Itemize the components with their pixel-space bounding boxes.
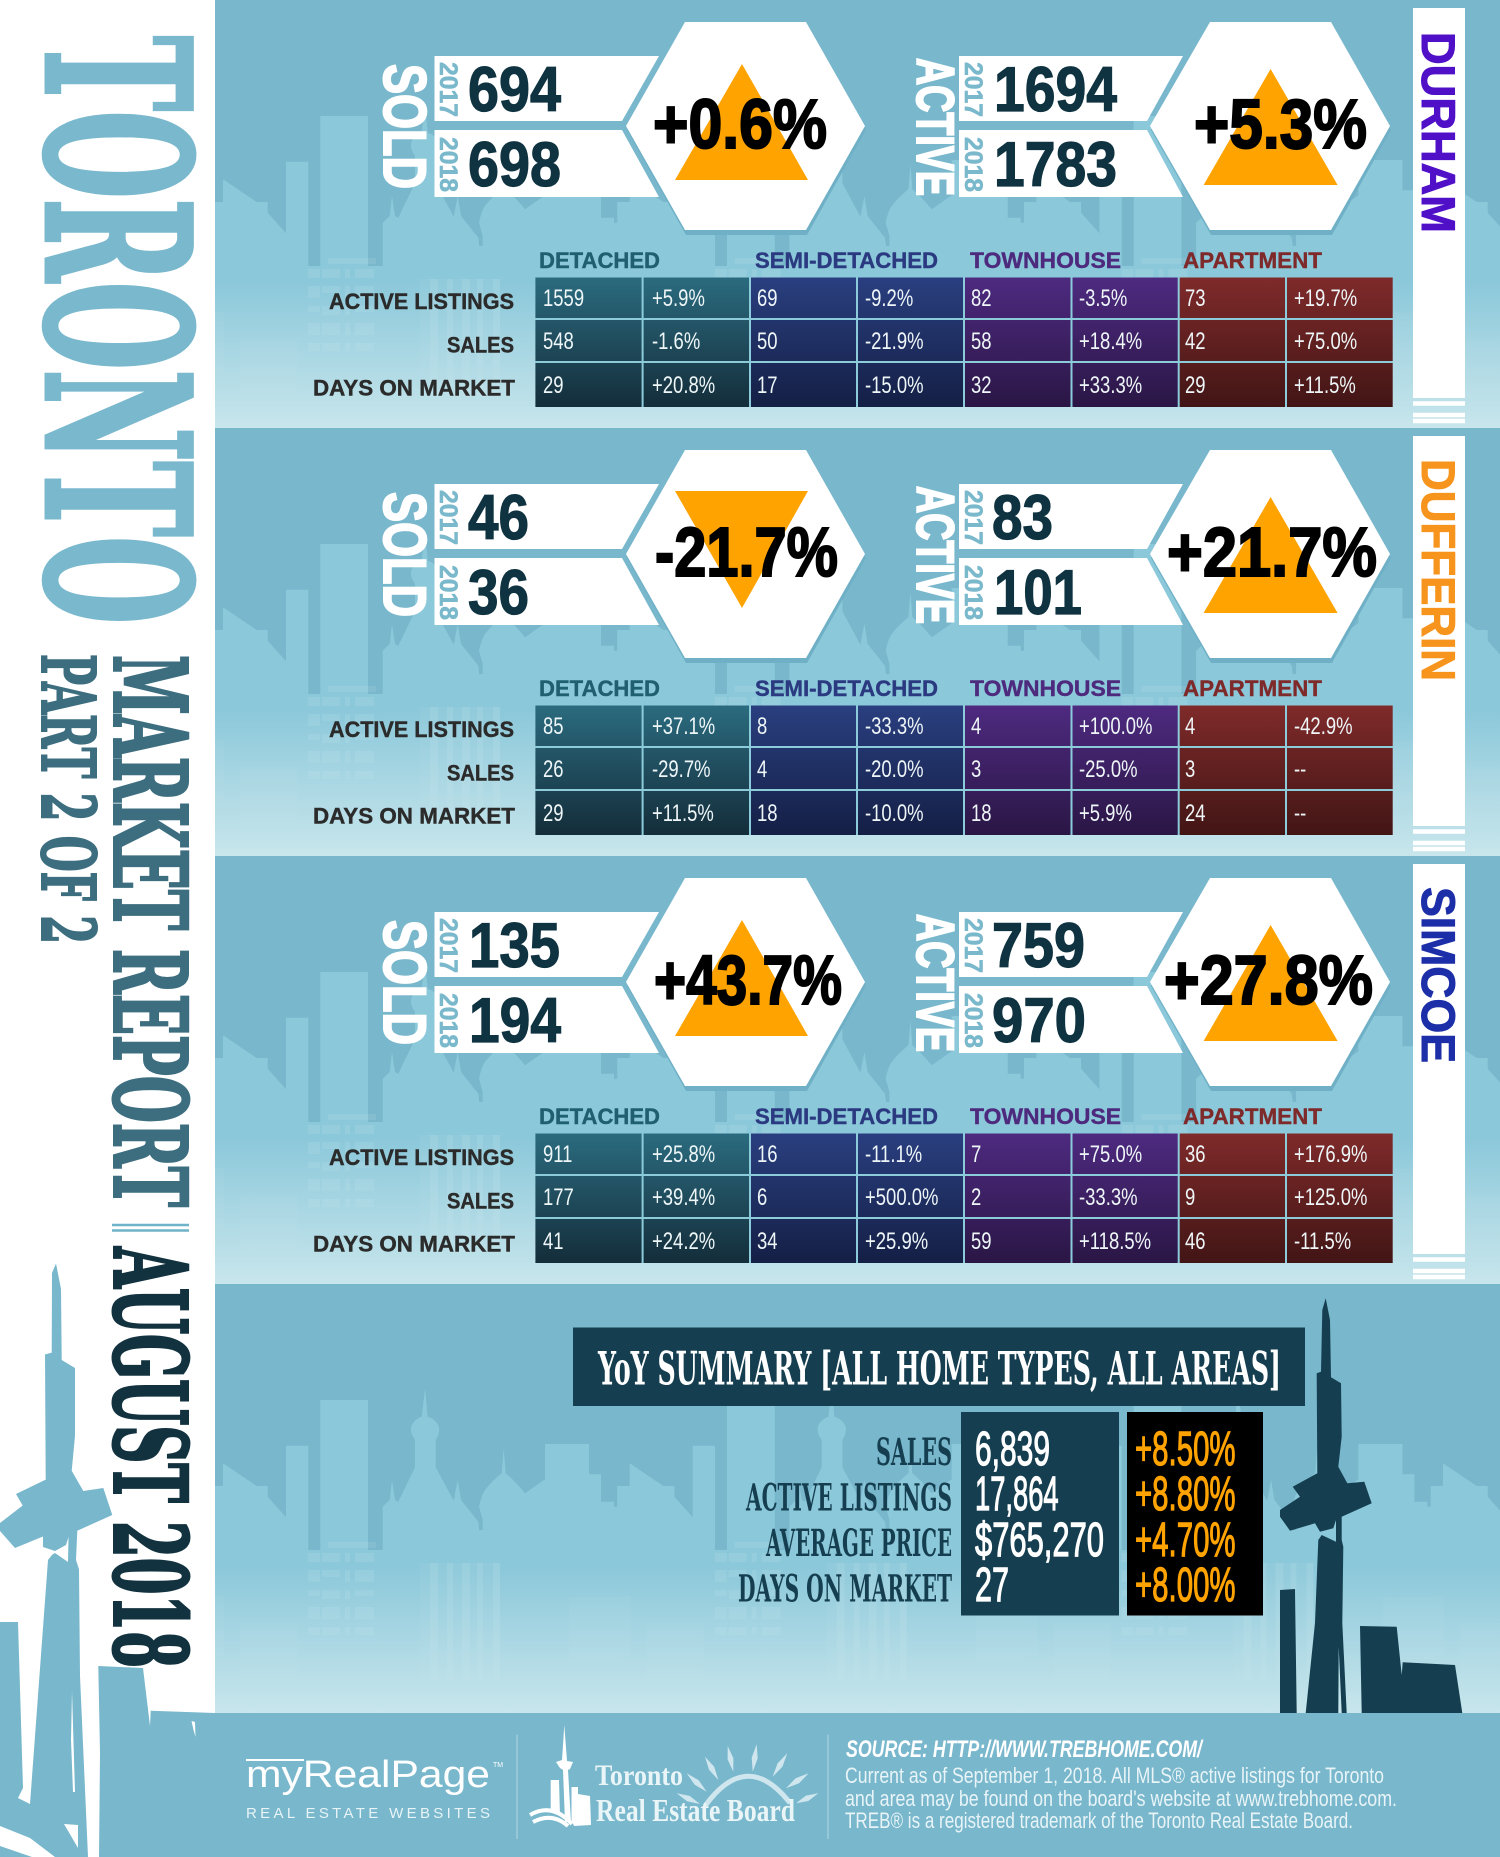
summary percentages: +8.00% [1135,1559,1236,1612]
region tab: Dufferin [1412,436,1465,849]
data table: +75.0% [1079,1141,1142,1168]
data table: 41 [543,1228,564,1255]
data table: 911 [543,1141,572,1168]
active banners [905,55,1183,200]
panel: Durham [215,0,1500,429]
data table: +39.4% [652,1184,715,1211]
title: Toronto: TORONTO [0,36,233,624]
table headers: DETACHED [539,676,660,701]
data table: -33.3% [865,713,924,740]
summary values: 6,839 [975,1423,1050,1476]
sold banners: 2018 [434,137,462,192]
data table: +19.7% [1294,285,1357,312]
active banners: 1783 [994,130,1117,200]
data table: +33.3% [1079,372,1142,399]
footer [98,1666,1500,1857]
data table: +20.8% [652,372,715,399]
data table: -25.0% [1079,756,1138,783]
data table: 18 [757,800,778,827]
table headers: SEMI-DETACHED [755,248,938,273]
data table: +11.5% [1294,372,1356,399]
summary labels: SALES [876,1430,952,1474]
sold banners: 698 [468,130,561,200]
sold banners [371,483,659,628]
icon: CN tower and buildings dark [1280,1298,1462,1713]
logo: myRealPage: REAL ESTATE WEBSITES [246,1805,490,1822]
data table: 17 [757,372,778,399]
summary labels [738,1430,952,1610]
data table: +75.0% [1294,328,1357,355]
data table: 85 [543,713,564,740]
data table: -21.9% [865,328,924,355]
active banners: 2017 [959,62,987,117]
logo: myRealPage: TM [493,1762,503,1769]
active banners: ACTIVE [905,914,964,1052]
data table: 7 [971,1141,981,1168]
logo: myRealPage: myRealPage [246,1754,490,1796]
data table: -42.9% [1294,713,1353,740]
sold banners: 2017 [434,62,462,117]
active banners: 83 [992,483,1053,553]
table headers: SEMI-DETACHED [755,676,938,701]
active banners [905,911,1183,1056]
data table: 58 [971,328,992,355]
data table: 3 [1185,756,1195,783]
summary percentages: +8.50% [1135,1423,1236,1476]
row labels: SALES [447,1188,514,1214]
data table: 4 [1185,713,1195,740]
data table: 29 [543,372,564,399]
summary labels: DAYS ON MARKET [738,1566,952,1610]
row labels: DAYS ON MARKET [313,804,516,828]
data table: -9.2% [865,285,913,312]
data table: 26 [543,756,564,783]
table headers: DETACHED [539,248,660,273]
summary labels: AVERAGE PRICE [765,1521,952,1565]
source note: Current as of September 1, 2018. All MLS® active listings for Toronto [845,1763,1384,1788]
summary values [961,1412,1119,1616]
active change hexagon [1150,22,1391,235]
title divider [112,1225,189,1230]
logo: Toronto Real Estate Board: Real Estate Board [596,1792,795,1828]
sold banners: 2018 [434,993,462,1048]
data table [535,1133,1393,1263]
sold banners: SOLD [371,64,438,189]
sold banners: 36 [468,558,529,628]
data table: +24.2% [652,1228,715,1255]
row labels: ACTIVE LISTINGS [329,289,514,314]
sold change hexagon: +0.6% [653,85,827,163]
data table: -11.1% [865,1141,922,1168]
data table: +25.9% [865,1228,928,1255]
table headers [539,248,1322,273]
data table: -1.6% [652,328,700,355]
row labels: ACTIVE LISTINGS [329,1145,514,1170]
active change hexagon [1150,878,1391,1091]
panel: Simcoe [215,856,1500,1285]
active change hexagon: +5.3% [1194,85,1367,163]
row labels: DAYS ON MARKET [313,1232,516,1256]
data table: 18 [971,800,992,827]
table headers: APARTMENT [1183,248,1322,273]
data table: -15.0% [865,372,924,399]
data table: -11.5% [1294,1228,1351,1255]
source note: TREB® is a registered trademark of the Toronto Real Estate Board. [845,1808,1353,1833]
data table: 1559 [543,285,584,312]
active banners: 759 [992,911,1085,981]
sold change hexagon: +43.7% [654,941,842,1019]
row labels: SALES [447,760,514,786]
table headers [539,1104,1322,1129]
active change hexagon: +27.8% [1164,941,1373,1019]
logo: Toronto Real Estate Board: Toronto [595,1759,683,1792]
data table: 4 [971,713,981,740]
region tab: Durham: DURHAM [1412,32,1465,233]
table headers: DETACHED [539,1104,660,1129]
sold banners: 694 [468,55,561,125]
data table: 69 [757,285,778,312]
sold banners: 135 [469,911,560,981]
sold change hexagon: -21.7% [655,513,838,591]
data table: 8 [757,713,767,740]
summary heading [573,1328,1305,1406]
data table: +25.8% [652,1141,715,1168]
sold banners: 2017 [434,918,462,973]
active banners: 2018 [959,565,987,620]
data table: +11.5% [652,800,714,827]
data table: -10.0% [865,800,924,827]
data table: 34 [757,1228,778,1255]
data table: 16 [757,1141,778,1168]
summary percentages: +8.80% [1135,1468,1236,1521]
sold banners: 46 [468,483,529,553]
sold banners: SOLD [371,492,438,617]
row labels: DAYS ON MARKET [313,376,516,400]
data table: 29 [1185,372,1206,399]
table headers: TOWNHOUSE [970,248,1121,273]
data table: 50 [757,328,778,355]
title: Part 2 of 2: PART 2 OF 2 [24,654,110,944]
sold change hexagon [626,22,866,235]
active banners [905,483,1183,628]
active change hexagon [1150,450,1391,663]
sold banners: SOLD [371,920,438,1045]
table headers: TOWNHOUSE [970,676,1121,701]
active banners: 1694 [994,55,1117,125]
data table [535,705,1393,835]
row labels: SALES [447,332,514,358]
data table: 46 [1185,1228,1206,1255]
data table: 59 [971,1228,992,1255]
data table: +18.4% [1079,328,1142,355]
sold banners [371,911,659,1056]
data table: -33.3% [1079,1184,1138,1211]
active banners: ACTIVE [905,58,964,196]
table headers: SEMI-DETACHED [755,1104,938,1129]
data table: +125.0% [1294,1184,1367,1211]
data table: 29 [543,800,564,827]
data table: 73 [1185,285,1206,312]
row labels: ACTIVE LISTINGS [329,717,514,742]
data table: +100.0% [1079,713,1152,740]
region tab: Simcoe [1412,864,1465,1277]
logo: Toronto Real Estate Board [530,1725,818,1828]
region tab: Simcoe: SIMCOE [1412,887,1465,1063]
active banners: ACTIVE [905,486,964,624]
data table: 548 [543,328,574,355]
data table: 82 [971,285,992,312]
data table: +5.9% [1079,800,1132,827]
table headers: TOWNHOUSE [970,1104,1121,1129]
data table: 32 [971,372,992,399]
summary values: 17,864 [975,1468,1059,1521]
table headers: APARTMENT [1183,676,1322,701]
data table: -3.5% [1079,285,1127,312]
title: Market Report: MARKET REPORT [90,655,208,1207]
summary percentages [1127,1412,1263,1616]
row labels [313,1145,516,1256]
region tab: Dufferin: DUFFERIN [1412,459,1465,681]
row labels [313,289,516,400]
summary percentages: +4.70% [1135,1514,1236,1567]
logo: myRealPage [246,1754,503,1822]
data table: 9 [1185,1184,1195,1211]
data table: +176.9% [1294,1141,1367,1168]
region tab: Durham [1412,8,1465,421]
row labels [313,717,516,828]
data table: 4 [757,756,767,783]
active banners: 2018 [959,993,987,1048]
sold banners [371,55,659,200]
data table: -- [1294,756,1306,783]
table headers [539,676,1322,701]
data table: 24 [1185,800,1206,827]
data table: -- [1294,800,1306,827]
data table: +118.5% [1079,1228,1151,1255]
data table: +37.1% [652,713,715,740]
sold change hexagon [626,450,866,663]
data table: -20.0% [865,756,924,783]
panel: Dufferin [215,428,1500,857]
data table [535,277,1393,407]
active change hexagon: +21.7% [1167,513,1377,591]
data table: 2 [971,1184,981,1211]
sold change hexagon [626,878,866,1091]
summary values: 27 [975,1559,1009,1612]
sold banners: 2017 [434,490,462,545]
active banners: 2017 [959,490,987,545]
panel: YoY summary [215,1284,1500,1713]
data table: 42 [1185,328,1206,355]
sold banners: 2018 [434,565,462,620]
active banners: 2018 [959,137,987,192]
summary labels: ACTIVE LISTINGS [745,1476,952,1520]
data table: 3 [971,756,981,783]
data table: +500.0% [865,1184,938,1211]
data table: +5.9% [652,285,705,312]
data table: 36 [1185,1141,1206,1168]
table headers: APARTMENT [1183,1104,1322,1129]
source note [845,1736,1397,1833]
sold banners: 194 [469,986,561,1056]
data table: 177 [543,1184,574,1211]
summary values: $765,270 [975,1514,1104,1567]
data table: -29.7% [652,756,711,783]
active banners: 970 [992,986,1086,1056]
active banners: 2017 [959,918,987,973]
active banners: 101 [994,558,1082,628]
icon: CN tower left [0,1264,112,1857]
data table: 6 [757,1184,767,1211]
source note: SOURCE: HTTP://WWW.TREBHOME.COM/ [846,1736,1204,1763]
